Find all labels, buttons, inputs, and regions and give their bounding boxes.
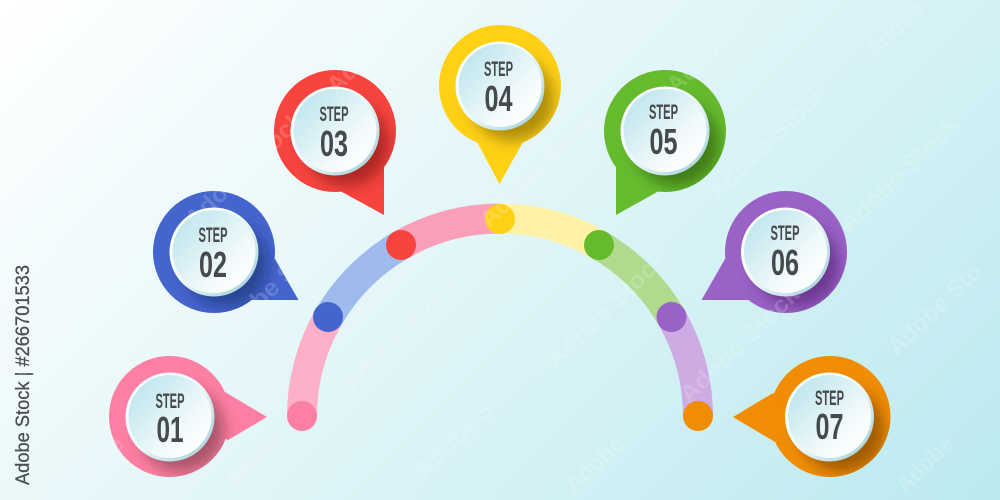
- label: 07: [816, 406, 844, 447]
- watermarks: Adobe: [890, 431, 959, 499]
- watermarks: Adobe S: [409, 395, 500, 484]
- watermarks: Adobe Stock: [675, 281, 805, 408]
- semicircular timeline arc: [287, 204, 713, 431]
- watermarks: Adobe S: [661, 10, 752, 99]
- disc: [785, 372, 874, 462]
- label: [770, 222, 800, 283]
- disc: [456, 42, 544, 130]
- purple pointer shape: [702, 191, 847, 313]
- watermarks: Adobe Stock: [42, 59, 172, 186]
- watermarks: Adobe: [220, 426, 289, 494]
- label: [815, 387, 844, 447]
- yellow pointer shape: [439, 25, 561, 184]
- watermarks: Adobe Stock: [703, 79, 833, 206]
- disc: [741, 208, 830, 296]
- green pointer shape: [604, 70, 726, 215]
- label: STEP: [156, 390, 184, 413]
- pink pointer shape: [109, 356, 267, 477]
- dot step 3: [386, 230, 416, 260]
- pin: step 01: [109, 356, 267, 477]
- stock id vertical text: Adobe Stock | #266701533: [13, 265, 34, 485]
- pin: step 02: [153, 191, 298, 313]
- watermarks: Adobe Stock: [180, 106, 310, 233]
- watermarks: Adobe S: [321, 10, 412, 99]
- label: [649, 101, 678, 162]
- dot step 4: [485, 204, 515, 234]
- label: [156, 390, 184, 450]
- watermarks: Adobe Sto: [882, 258, 987, 361]
- arc segment 6 to 7: [672, 318, 698, 416]
- pin: step 05: [604, 70, 726, 215]
- pin: step 04: [439, 25, 561, 184]
- label: 06: [771, 242, 799, 283]
- label: STEP: [484, 58, 513, 81]
- label: [198, 224, 228, 285]
- dot step 1: [287, 401, 317, 431]
- arc segment 2 to 3: [328, 245, 401, 318]
- disc: [620, 86, 710, 176]
- label: 01: [156, 409, 184, 450]
- blue pointer shape: [153, 191, 298, 313]
- orange pointer shape: [733, 356, 890, 477]
- dot step 5: [584, 230, 614, 260]
- arc segment 3 to 4: [401, 218, 500, 245]
- watermarks: Adobe Stock: [475, 106, 605, 233]
- pin: step 06: [702, 191, 847, 313]
- pin: step 07: [733, 356, 890, 477]
- watermarks: Adobe Stock: [542, 246, 672, 373]
- watermarks: Adobe Stock: [835, 111, 965, 238]
- disc: [290, 86, 380, 176]
- label: STEP: [770, 222, 800, 245]
- watermarks: Adobe: [60, 431, 129, 499]
- dot step 7: [683, 401, 713, 431]
- label: 04: [484, 78, 512, 119]
- arc segment 4 to 5: [500, 218, 599, 245]
- pin: step 03: [274, 70, 396, 215]
- disc: [170, 208, 258, 296]
- watermarks: Adobe Stock: [210, 221, 340, 348]
- watermarks: Adobe Stock: [8, 261, 138, 388]
- dot step 6: [656, 302, 686, 332]
- label: 03: [320, 123, 348, 164]
- arc segment 1 to 2: [302, 318, 328, 416]
- label: STEP: [649, 101, 678, 124]
- red pointer shape: [274, 70, 396, 215]
- label: 02: [199, 244, 227, 285]
- label: STEP: [320, 103, 348, 126]
- watermarks: Adobe: [560, 431, 629, 499]
- label: STEP: [815, 387, 844, 410]
- watermarks: Adobe Stock: [338, 271, 468, 398]
- disc: [126, 372, 214, 462]
- arc segment 5 to 6: [599, 245, 672, 318]
- dot step 2: [313, 302, 343, 332]
- label: [320, 103, 348, 164]
- label: STEP: [198, 224, 228, 247]
- label: 05: [650, 121, 678, 162]
- label: [484, 58, 513, 119]
